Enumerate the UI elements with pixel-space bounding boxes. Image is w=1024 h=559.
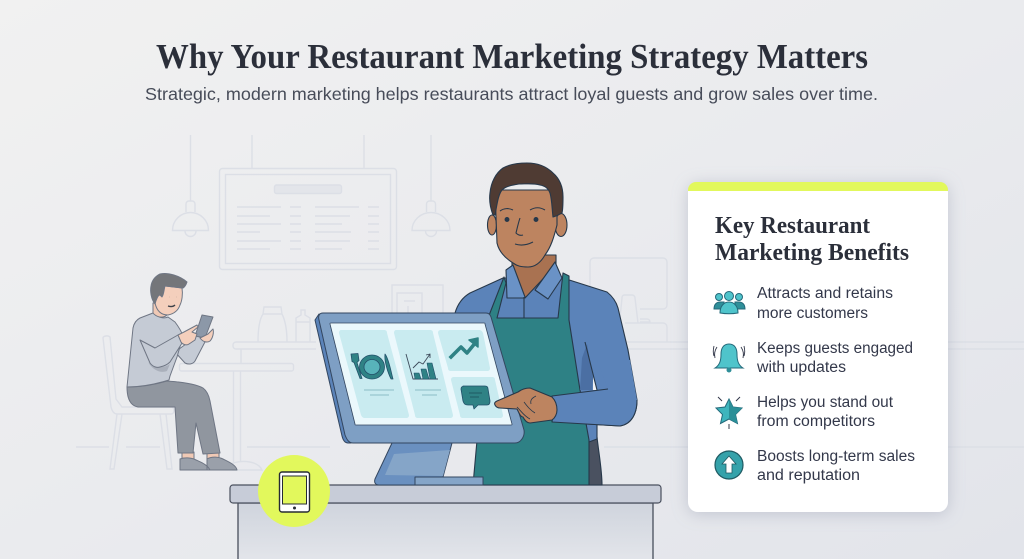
collar [506,262,562,299]
icon: growth arrow [451,342,476,357]
pointing hand over screen [495,388,557,423]
barista [455,163,637,485]
caption lines [415,390,441,395]
monitor back edge [315,314,351,443]
benefit: sales [715,448,915,484]
sleeve fold [585,342,597,390]
lime circle [258,455,330,527]
background restaurant line art [76,135,1024,470]
text [756,340,913,376]
icon: speech bubble [461,386,490,409]
hair [490,163,563,217]
dashboard panel: growth [438,330,490,371]
apron [473,273,589,485]
bubble text lines [469,393,482,397]
card background [688,182,948,512]
monitor frame [319,313,524,443]
card heading [715,213,909,266]
POS tablet screen [315,313,524,443]
panel: key benefits card [688,182,948,512]
icon: up arrow circle [715,451,743,479]
text: more customers [757,305,868,322]
dark trousers [589,437,602,485]
bottle on shelf [296,310,310,342]
armpit gap [593,377,597,390]
paper bag on shelf [258,307,287,342]
benefit: stand out [716,394,894,430]
shelf end [233,342,241,363]
customer near arm [140,335,184,367]
customer facial features [168,297,176,307]
text: Keeps guests engaged [757,340,913,357]
customer trousers [127,381,220,454]
icon: people [714,292,745,314]
shirt lower strip [586,424,597,442]
sleeve shade [580,344,593,390]
text: Boosts long-term sales [757,448,915,465]
sweater shade [148,362,170,372]
register behind monitor [392,285,443,313]
caption lines [364,390,394,395]
shop counter [230,485,661,559]
customer far arm [175,335,206,364]
customer neck [153,303,167,317]
text: and reputation [757,467,860,484]
icon: fork, plate and knife [351,354,393,379]
icon: tablet [280,472,310,512]
text: with updates [756,359,846,376]
floor line [76,446,1024,448]
dashboard panel: message [451,377,503,418]
card heading: Key Restaurant [715,213,870,239]
phone [195,315,213,338]
customer head [155,285,182,315]
title: Why Your Restaurant Marketing Strategy Matters [156,37,868,76]
customer hands [178,325,213,345]
forearm outline [552,389,637,426]
cafe table [180,364,294,470]
customer hair [151,273,187,304]
icon: bell [713,344,745,372]
neck [512,255,556,298]
text: from competitors [757,413,875,430]
forearm sleeve [552,360,637,426]
shirt torso [455,278,637,430]
icon: bar chart with trend [406,354,438,379]
text [757,394,894,430]
subtitle: Strategic, modern marketing helps restaurants attract loyal guests and grow sales over time. [145,84,878,104]
seated customer with phone [127,273,237,470]
placket [523,297,525,318]
menu board [220,135,396,270]
dashboard panel: chart [394,330,453,418]
right pendant lamp [412,135,450,236]
counter body [238,503,653,559]
monitor screen [330,323,512,425]
card heading: Marketing Benefits [715,240,909,266]
back counter shelf [236,342,1024,349]
text: Attracts and retains [757,285,893,302]
customer shoes [180,457,237,470]
right ear [555,214,567,236]
chair [103,336,174,469]
text [757,448,915,484]
benefit: updates [713,340,913,376]
POS monitor stand [375,443,483,485]
text: Helps you stand out [757,394,894,411]
lime top band [688,182,948,191]
back monitor [590,258,667,342]
customer sweater [127,313,183,387]
left ear [488,215,496,235]
facial features [500,208,545,245]
tablet badge [258,455,330,527]
arrow head [469,338,478,347]
customer ankles [182,452,219,460]
face [495,190,557,267]
left pendant lamp [172,135,208,236]
benefit: customers [714,285,893,322]
icon: star [716,397,742,429]
text [757,285,893,322]
dashboard panel: menu [339,330,409,418]
counter top [230,485,661,503]
